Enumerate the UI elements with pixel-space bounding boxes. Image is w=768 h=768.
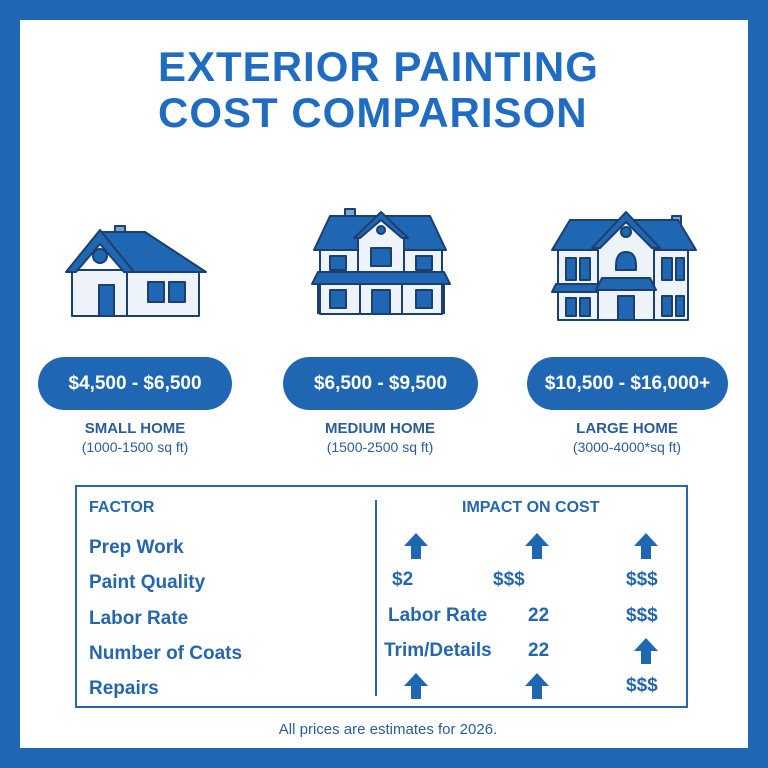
title: [158, 43, 599, 136]
pill: large price: [527, 357, 728, 410]
label: small home: (1000-1500 sq ft): [82, 439, 188, 455]
impact values: 22: [528, 640, 549, 661]
pill: small price: [38, 357, 232, 410]
title: COST COMPARISON: [158, 89, 588, 136]
title: EXTERIOR PAINTING: [158, 43, 599, 90]
factor list: Repairs: [89, 678, 159, 699]
icon: medium house: [311, 208, 451, 315]
factor list: Labor Rate: [89, 608, 188, 629]
impact values: $$$: [626, 569, 658, 590]
factor list: Number of Coats: [89, 643, 242, 664]
pill: medium price: $6,500 - $9,500: [314, 373, 447, 394]
label: small home: [82, 420, 188, 455]
factor list: Paint Quality: [89, 572, 205, 593]
icon: large house: [551, 211, 697, 321]
factor list: [89, 537, 242, 699]
header: factor: FACTOR: [89, 499, 154, 516]
pill: small price: $4,500 - $6,500: [68, 373, 202, 394]
impact values: Trim/Details: [384, 640, 492, 661]
label: large home: LARGE HOME: [576, 420, 678, 437]
impact values: 22: [528, 605, 549, 626]
label: large home: (3000-4000*sq ft): [573, 439, 681, 455]
pill: large price: $10,500 - $16,000+: [545, 373, 710, 394]
icon: small house: [65, 225, 207, 317]
label: small home: SMALL HOME: [85, 420, 185, 437]
header: impact: IMPACT ON COST: [462, 499, 599, 516]
label: large home: [573, 420, 681, 455]
impact values: $$$: [626, 675, 658, 696]
impact values: $2: [392, 569, 413, 590]
impact values: Labor Rate: [388, 605, 487, 626]
label: medium home: (1500-2500 sq ft): [327, 439, 433, 455]
pill: medium price: [283, 357, 478, 410]
impact values: $$$: [493, 569, 525, 590]
impact values: $$$: [626, 605, 658, 626]
table: factors: [75, 485, 688, 708]
impact values: [384, 533, 658, 699]
label: medium home: [325, 420, 435, 455]
factor list: Prep Work: [89, 537, 184, 558]
footnote: All prices are estimates for 2026.: [279, 721, 497, 738]
label: medium home: MEDIUM HOME: [325, 420, 435, 437]
